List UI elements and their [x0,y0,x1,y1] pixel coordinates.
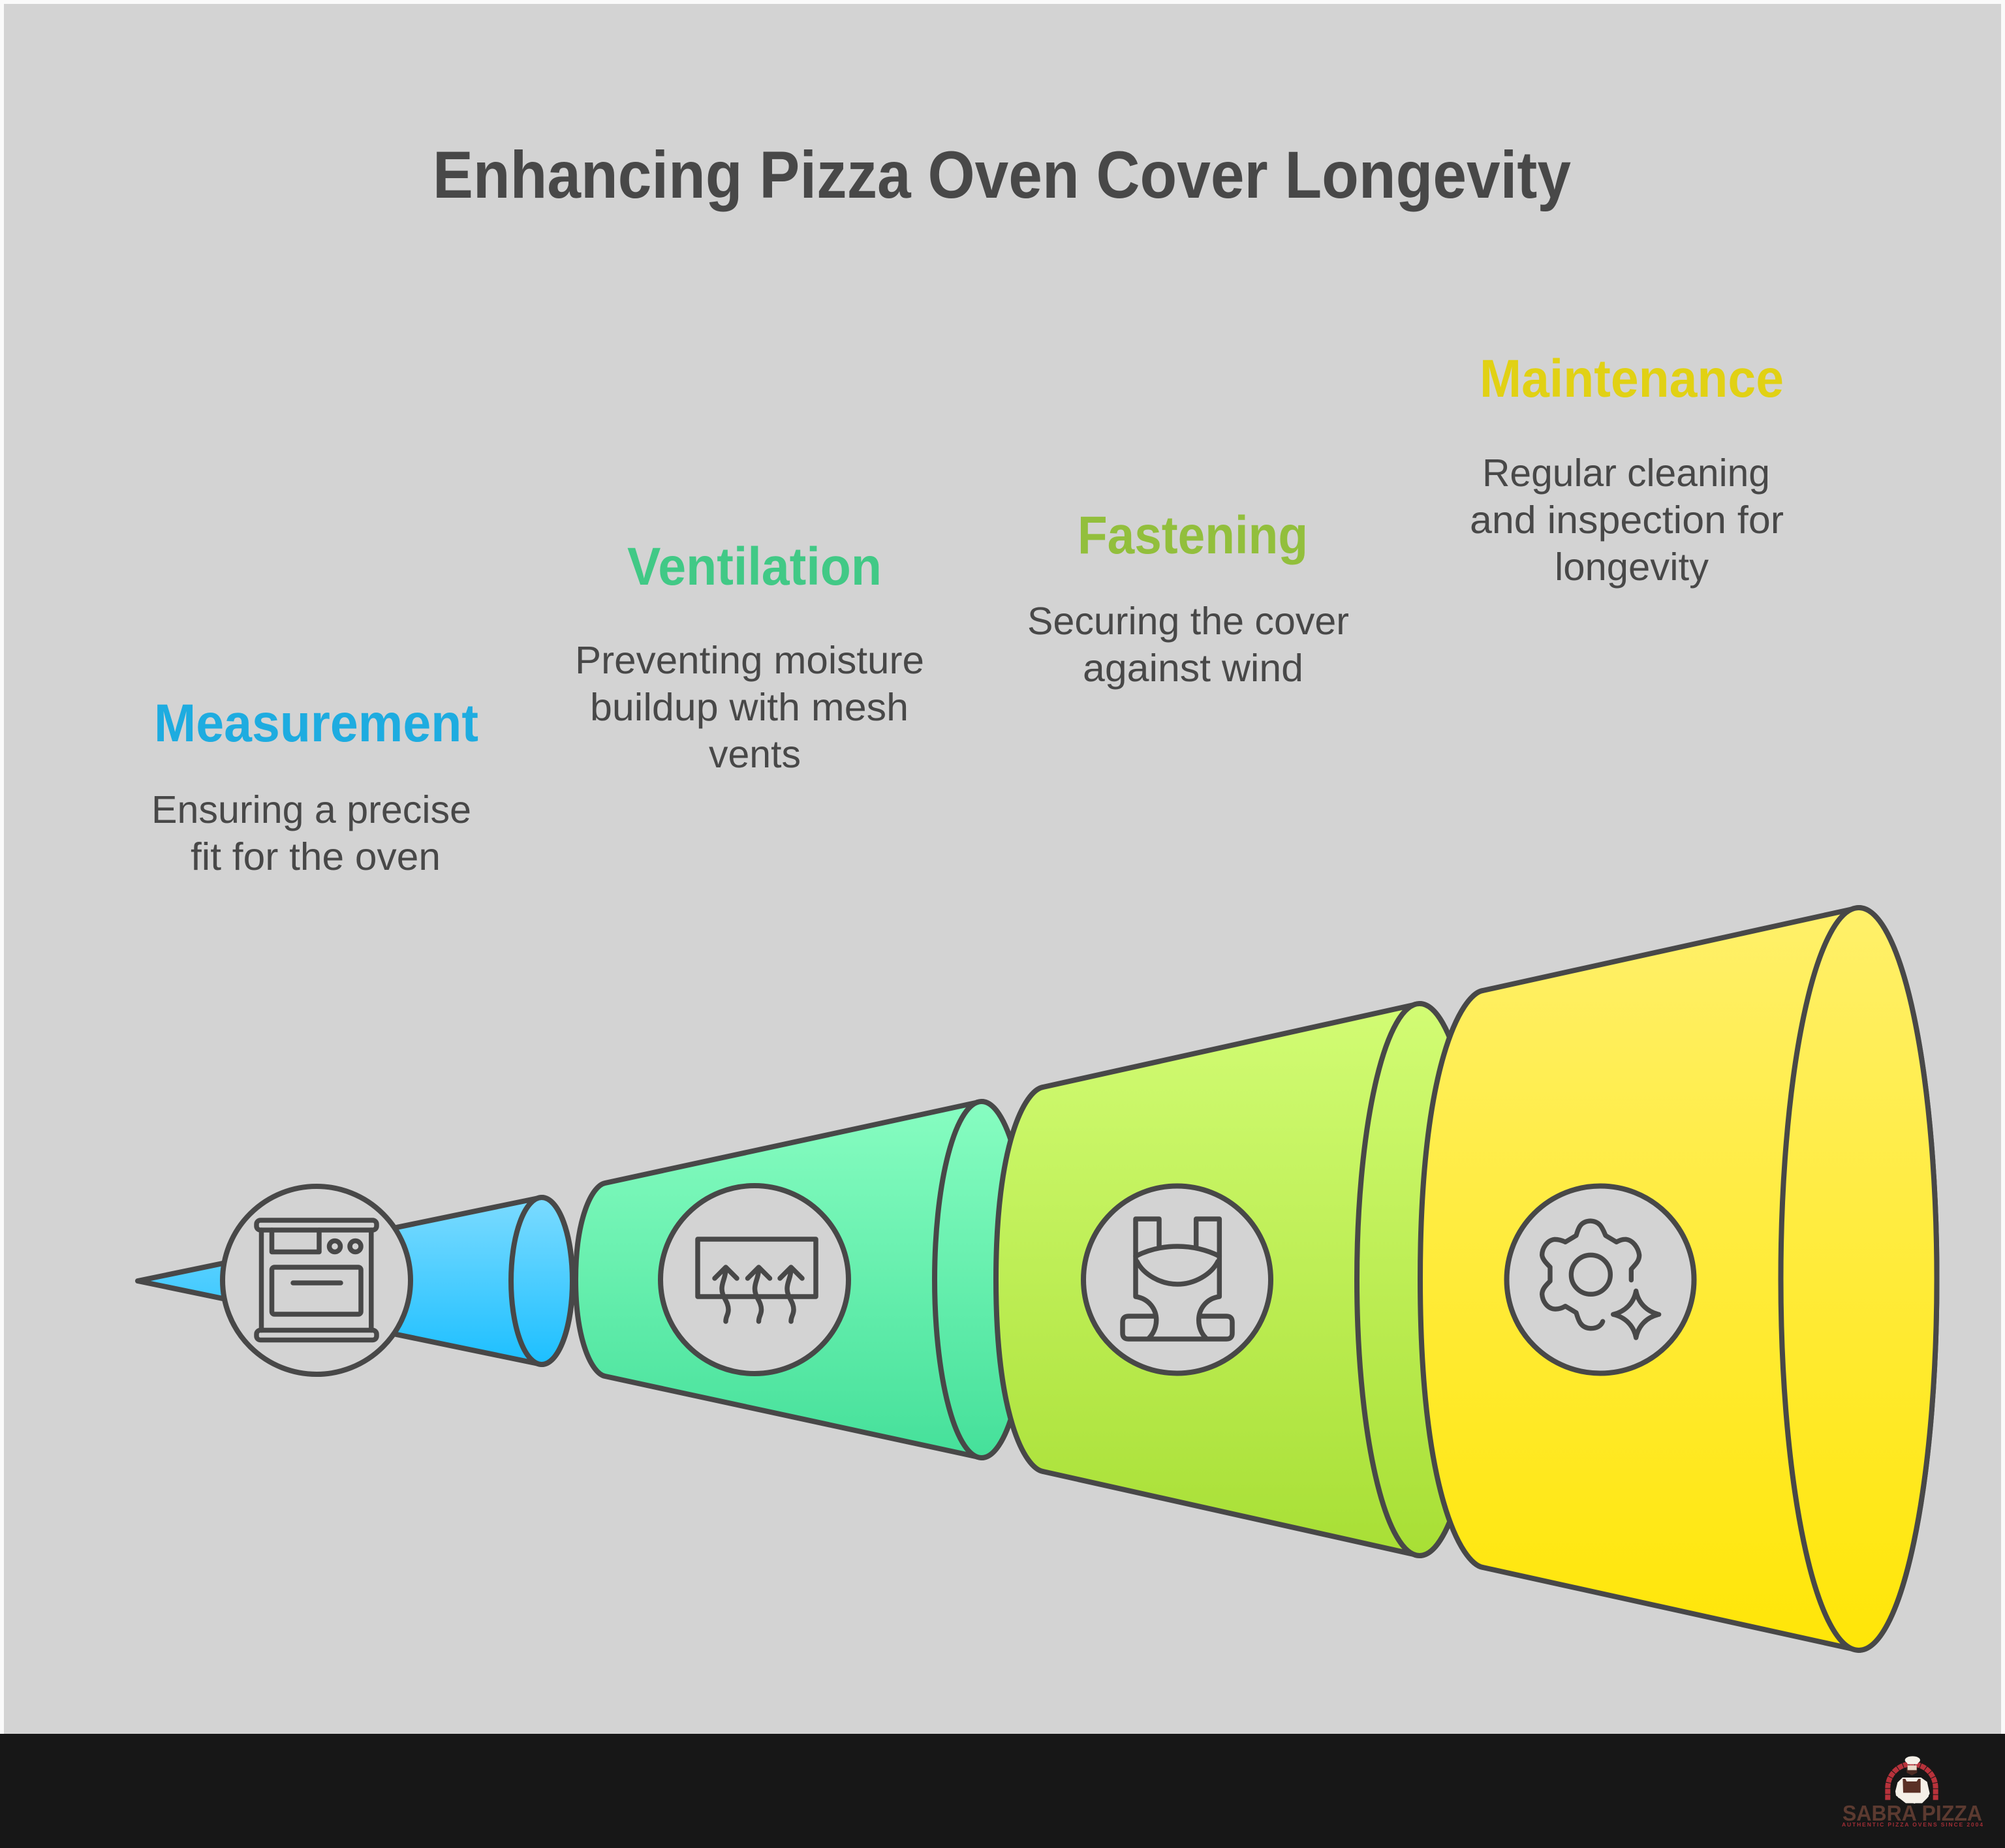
cone body 3 [996,1004,1482,1556]
text block: maintenance [1470,349,1784,589]
icon circle 3 [1083,1186,1271,1373]
description: ventilation: vents [709,733,801,776]
description: fastening: against wind [1083,647,1303,690]
description: measurement [151,788,471,878]
title: Enhancing Pizza Oven Cover Longevity [433,138,1571,212]
description: measurement: fit for the oven [191,835,441,878]
logo: Sabra Pizza [1842,1756,1983,1828]
cone mouth 2 [935,1101,1029,1458]
heading: fastening: Fastening [1078,506,1308,565]
logo emblem: chef and brick arch [1888,1756,1936,1804]
description: maintenance: longevity [1555,546,1709,589]
cone mouth 1 [511,1197,572,1364]
logo tagline: AUTHENTIC PIZZA OVENS SINCE 2004 [1842,1821,1983,1828]
description: measurement: Ensuring a precise [151,788,471,831]
icon: harness strap [1123,1219,1232,1339]
logo wordmark: SABRA PIZZA [1842,1801,1982,1825]
text block: measurement [151,694,478,878]
text block: fastening [1027,506,1349,690]
description: ventilation: Preventing moisture [575,639,924,682]
cone body 4 [1420,908,1937,1650]
funnel diagram [138,908,1937,1650]
description: fastening [1027,600,1349,690]
cone body 2 [576,1101,1029,1458]
icon circle 1 [223,1186,411,1374]
heading: ventilation: Ventilation [627,537,882,596]
description: maintenance [1470,452,1784,589]
cone mouth 3 [1357,1004,1482,1556]
icon circle 2 [661,1186,848,1374]
description: ventilation: buildup with mesh [590,686,909,729]
description: fastening: Securing the cover [1027,600,1349,643]
cone body 1 [138,1197,572,1364]
cone mouth 4 [1780,908,1937,1650]
segment 3: fastening cone [996,1004,1482,1556]
footer band [0,1734,2005,1848]
segment 1: measurement cone [138,1186,572,1374]
icon: mesh vent [698,1239,816,1321]
text block: ventilation [575,537,924,776]
icon: oven [256,1220,377,1340]
description: ventilation [575,639,924,776]
description: maintenance: Regular cleaning [1482,452,1770,495]
icon circle 4 [1506,1186,1694,1373]
heading: maintenance: Maintenance [1480,349,1784,408]
description: maintenance: and inspection for [1470,499,1784,542]
segment 4: maintenance cone [1420,908,1937,1650]
icon: gear with sparkle [1542,1221,1659,1338]
heading: measurement: Measurement [154,694,478,753]
segment 2: ventilation cone [576,1101,1029,1458]
